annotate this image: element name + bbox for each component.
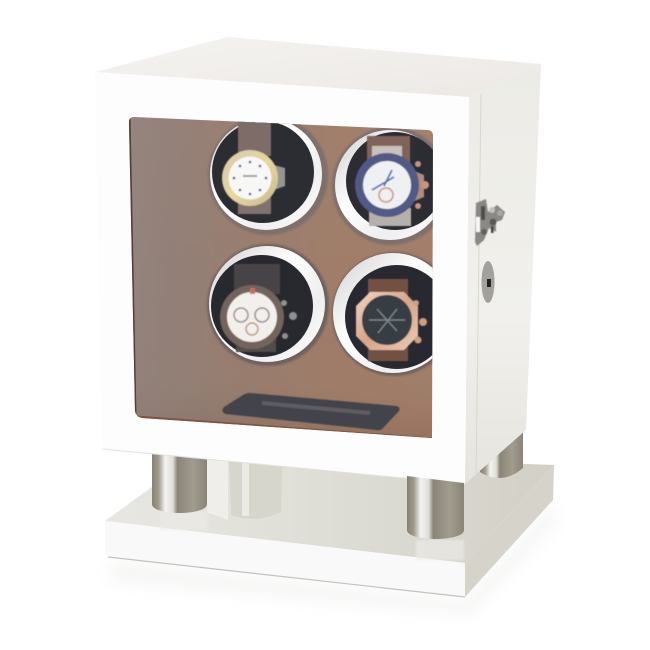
reflected pillars on base bbox=[160, 512, 208, 530]
rear-right pillar bbox=[480, 430, 523, 478]
winder top-left with gold watch bbox=[208, 115, 328, 235]
winder bottom-left with chronograph watch bbox=[207, 244, 329, 366]
clasp latch bbox=[475, 199, 505, 246]
key lock plate bbox=[482, 261, 494, 303]
latch and lock hardware bbox=[475, 199, 505, 303]
base front face bbox=[105, 521, 465, 597]
reflection of rear-left pillar bbox=[207, 455, 228, 520]
base top surface bbox=[105, 452, 554, 563]
glass window with watches bbox=[129, 117, 433, 438]
product illustration: four-watch winder cabinet bbox=[96, 37, 554, 598]
cabinet right side bbox=[465, 64, 541, 484]
cabinet body bbox=[95, 37, 541, 484]
winder bottom-right with rose-gold watch bbox=[331, 251, 433, 377]
cabinet top face bbox=[95, 37, 541, 97]
cabinet front frame bbox=[95, 72, 469, 484]
base plinth bbox=[105, 452, 554, 597]
glass reflection wash bbox=[125, 112, 437, 442]
back pillars and reflection bbox=[207, 430, 523, 520]
window glass back panel bbox=[125, 112, 437, 442]
base right side bbox=[465, 465, 554, 597]
pillar: front left bbox=[152, 450, 207, 513]
floor shadow bbox=[110, 505, 560, 616]
control panel tray bbox=[222, 393, 400, 430]
pillar: front right bbox=[407, 476, 464, 539]
winder top-right with blue-bezel watch bbox=[332, 128, 433, 246]
